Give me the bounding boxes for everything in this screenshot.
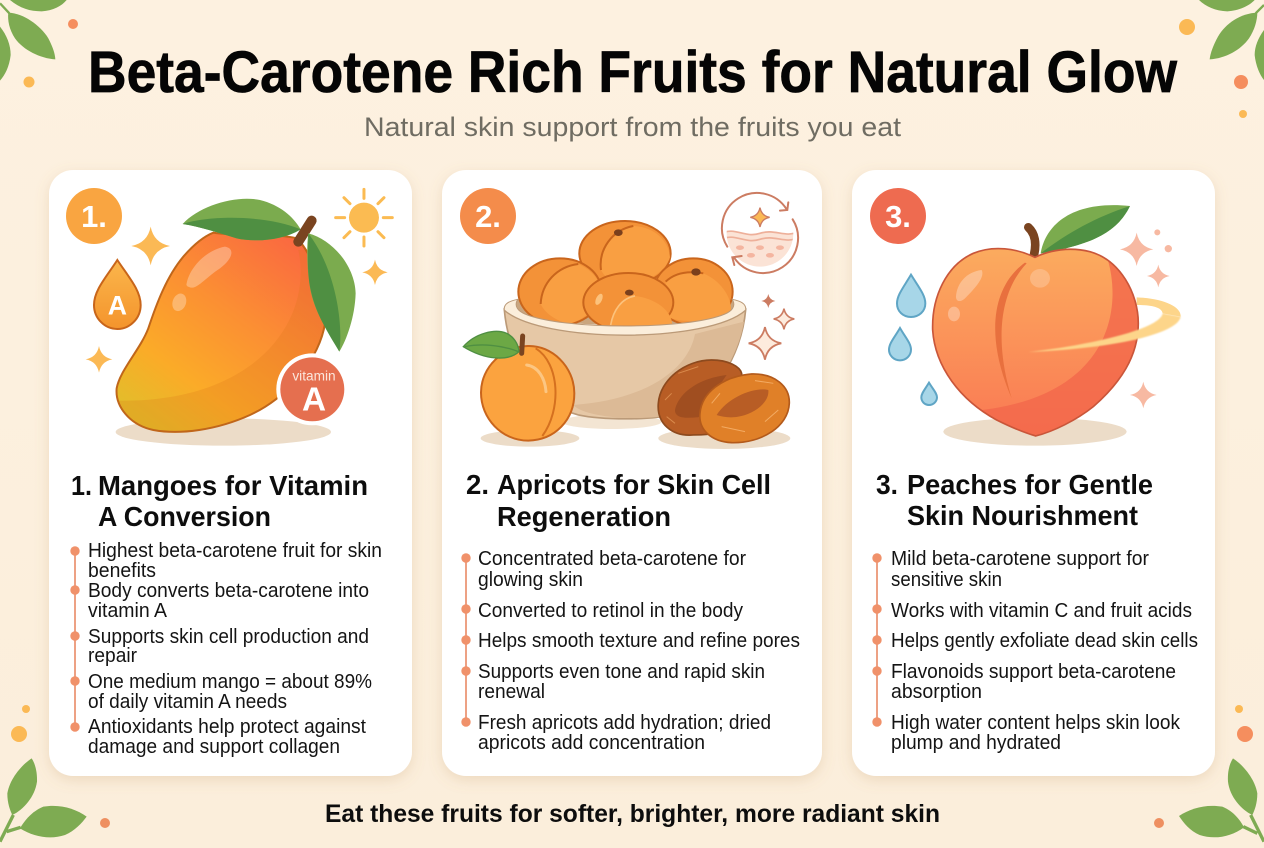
icon: sparkles (86, 227, 388, 373)
icon: vitamin A badge: A (302, 382, 326, 419)
heading: 3. (876, 469, 898, 500)
title: Beta-Carotene Rich Fruits for Natural Glow (88, 40, 1178, 105)
bullet list: Helps smooth texture and refine pores (478, 630, 800, 652)
icon: vitamin A drop: A (108, 290, 127, 320)
bullet list: apricots add concentration (478, 732, 705, 754)
bullet list: vitamin A (88, 600, 168, 622)
icon: sparkles (749, 294, 794, 360)
heading (71, 470, 368, 532)
bullet list: glowing skin (478, 569, 583, 591)
fresh apricot (463, 331, 579, 447)
illustration: mango with vitamin A (86, 189, 392, 446)
badge: number 3 (870, 188, 926, 244)
heading: Regeneration (497, 501, 671, 532)
heading (876, 469, 1153, 531)
corner leaves: bottom left (0, 758, 87, 842)
icon: water drops (889, 275, 937, 405)
bullet list: sensitive skin (891, 569, 1002, 591)
bullet list: absorption (891, 681, 982, 703)
heading: 2. (466, 469, 489, 500)
bullet list (461, 548, 800, 754)
bullet list: repair (88, 645, 137, 667)
footer tagline: Eat these fruits for softer, brighter, more radiant skin (325, 800, 940, 828)
bullet list: Fresh apricots add hydration; dried (478, 712, 771, 734)
heading: Peaches for Gentle (907, 469, 1153, 500)
bullet list: Body converts beta-carotene into (88, 580, 369, 602)
corner leaves: top left (0, 0, 67, 81)
bullet list: Concentrated beta-carotene for (478, 548, 746, 570)
bullet list: of daily vitamin A needs (88, 691, 287, 713)
icon: skin renewal (722, 193, 798, 273)
illustration: apricot bowl (463, 193, 798, 449)
heading: Apricots for Skin Cell (497, 469, 771, 500)
heading (466, 469, 771, 532)
bullet list: Antioxidants help protect against (88, 716, 366, 738)
bullet list: Works with vitamin C and fruit acids (891, 600, 1192, 622)
bullet list: plump and hydrated (891, 732, 1061, 754)
panel: mangoes (49, 170, 412, 776)
bullet list: benefits (88, 560, 156, 582)
panel: apricots (442, 170, 822, 776)
bullet list: Flavonoids support beta-carotene (891, 661, 1176, 683)
corner leaves: top right (1199, 0, 1264, 80)
dried apricots (658, 360, 790, 449)
panel: peaches (852, 170, 1215, 776)
bullet list: Mild beta-carotene support for (891, 548, 1149, 570)
badge: number 1 (66, 188, 122, 244)
bullet list: damage and support collagen (88, 736, 340, 758)
badge: number 2: 2. (475, 199, 501, 234)
icon: sparkles (1120, 229, 1172, 408)
bullet list (872, 548, 1198, 754)
bullet list: Helps gently exfoliate dead skin cells (891, 630, 1198, 652)
badge: number 2 (460, 188, 516, 244)
bullet list: Supports skin cell production and (88, 626, 369, 648)
bullet list: Supports even tone and rapid skin (478, 661, 765, 683)
illustration: peach (889, 205, 1181, 446)
bullet list: Highest beta-carotene fruit for skin (88, 540, 382, 562)
heading: Skin Nourishment (907, 500, 1138, 531)
icon: vitamin A drop (94, 260, 141, 329)
heading: A Conversion (98, 501, 271, 532)
badge: number 1: 1. (81, 199, 107, 234)
bullet list (70, 540, 382, 758)
corner leaves: bottom right (1179, 758, 1264, 842)
badge: number 3: 3. (885, 199, 911, 234)
heading: Mangoes for Vitamin (98, 470, 368, 501)
bullet list: One medium mango = about 89% (88, 671, 372, 693)
heading: 1. (71, 470, 92, 501)
icon: vitamin A badge: vitamin (292, 369, 336, 384)
glow swoosh (1028, 313, 1181, 352)
bullet list: Converted to retinol in the body (478, 600, 743, 622)
icon: vitamin A badge (276, 353, 348, 425)
icon: sun (336, 189, 392, 246)
bullet list: High water content helps skin look (891, 712, 1181, 734)
subtitle: Natural skin support from the fruits you eat (364, 112, 902, 142)
bullet list: renewal (478, 681, 545, 703)
